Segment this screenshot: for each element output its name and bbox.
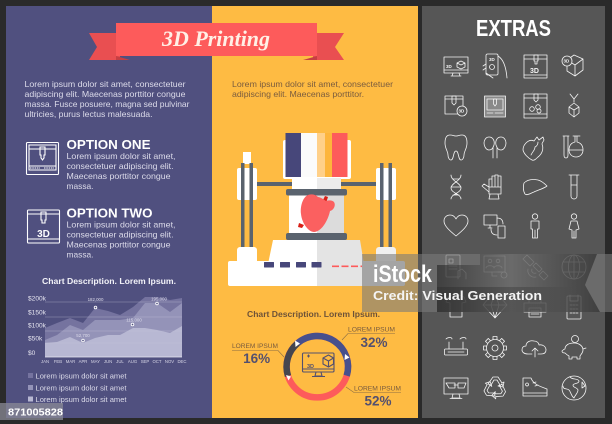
area chart: AUG bbox=[128, 359, 138, 364]
watermark band bbox=[362, 254, 612, 312]
option two text: Lorem ipsum dolor sit amet, bbox=[66, 220, 176, 230]
icon: test tube bbox=[569, 175, 579, 199]
title: 3D Printing bbox=[161, 26, 270, 51]
icon: 3D glasses monitor bbox=[444, 378, 468, 398]
icon: cloud upload bbox=[522, 341, 546, 357]
icon: robot claw cube bbox=[569, 94, 579, 117]
panel: centre yellow bbox=[212, 6, 418, 418]
donut chart bbox=[286, 336, 350, 397]
icon: cube 3D bbox=[562, 55, 583, 76]
intro text: left: massa. Fusce posuere, magna sed pulvinar bbox=[24, 99, 190, 109]
icon: box 3D badge bbox=[445, 96, 467, 116]
watermark text: iStock bbox=[373, 261, 433, 288]
option one text: Maecenas porttitor congue bbox=[66, 171, 171, 181]
panel: left purple bbox=[6, 6, 212, 418]
area chart: NOV bbox=[165, 359, 174, 364]
icon: printer 3D bbox=[524, 55, 547, 78]
icon: option one printer bbox=[26, 142, 58, 174]
icon: sneaker bbox=[523, 378, 547, 396]
icon: heart model bbox=[298, 194, 335, 232]
icon grid bbox=[444, 54, 586, 401]
callout: 32% bbox=[342, 326, 395, 350]
icon: phone in hand bbox=[483, 54, 507, 78]
area chart: FEB bbox=[54, 359, 62, 364]
chart heading: left: Chart Description. Lorem Ipsum. bbox=[42, 276, 176, 286]
callout: 52%: 52% bbox=[364, 394, 392, 408]
icon: monitor with 3D cube bbox=[302, 353, 334, 376]
intro text: left bbox=[24, 79, 190, 119]
icon: option two printer: 3D bbox=[37, 229, 50, 240]
area chart: 195,000 bbox=[151, 296, 167, 302]
icon: heart bbox=[444, 215, 468, 236]
option two text: massa. bbox=[66, 250, 94, 260]
chart heading: centre: Chart Description. Lorem Ipsum. bbox=[247, 309, 380, 319]
3D printer illustration bbox=[228, 133, 405, 286]
icon: man bbox=[531, 214, 539, 238]
area chart: $100k bbox=[28, 322, 47, 330]
callout: 52% bbox=[346, 386, 401, 408]
icon: phone with hand bbox=[446, 255, 466, 279]
icon: t-shirt bbox=[446, 295, 466, 317]
callout: 32%: 32% bbox=[360, 335, 388, 350]
image id tag bbox=[0, 403, 63, 420]
icon: printer office bbox=[524, 297, 546, 317]
area chart: SEP bbox=[141, 359, 149, 364]
area chart: APR bbox=[79, 359, 87, 364]
intro text: left: ultricies, purus lectus malesuada. bbox=[24, 109, 152, 119]
option two text: consectetuer adipiscing elit. bbox=[66, 230, 174, 240]
icon: world wide web bbox=[562, 255, 586, 279]
area chart: 52,700 bbox=[76, 333, 90, 338]
callout: 52%: LOREM IPSUM bbox=[354, 386, 401, 392]
icon: phone in hand: 3D bbox=[489, 57, 496, 62]
icon: monitor 3D: 3D bbox=[446, 64, 453, 69]
area chart: $50k bbox=[28, 336, 43, 342]
icon: tooth bbox=[445, 135, 467, 160]
area chart: JAN bbox=[41, 359, 49, 364]
area chart: DEC bbox=[177, 359, 187, 364]
area chart: $200k bbox=[28, 296, 47, 302]
icon: printer with cubes bbox=[524, 94, 547, 118]
intro text: left: adipiscing elit. Maecenas porttitor congue bbox=[24, 89, 186, 99]
icon: woman bbox=[569, 214, 579, 238]
icon: liver bbox=[523, 179, 547, 195]
icon: globe bbox=[562, 376, 586, 400]
area chart: MAY bbox=[91, 359, 100, 364]
chart legend: Lorem ipsum dolor sit amet bbox=[36, 383, 126, 392]
area chart bbox=[28, 296, 187, 364]
option one text: massa. bbox=[66, 181, 94, 191]
callout: 16% bbox=[232, 343, 284, 366]
callout: 16%: LOREM IPSUM bbox=[232, 343, 278, 350]
intro text: centre: adipiscing elit. Maecenas porttitor. bbox=[232, 89, 364, 99]
title ribbon bbox=[89, 23, 344, 60]
area chart: JUN bbox=[104, 359, 112, 364]
option one text: Lorem ipsum dolor sit amet, bbox=[66, 151, 176, 161]
icon: robotic hand bbox=[482, 175, 501, 199]
intro text: left: Lorem ipsum dolor sit amet, consectetuer bbox=[24, 79, 186, 89]
option one text bbox=[66, 138, 176, 191]
icon: piggy bank bbox=[562, 336, 586, 359]
icon: presentation screen bbox=[484, 256, 507, 278]
area chart: $150k bbox=[28, 310, 47, 316]
chart legend: Lorem ipsum dolor sit amet bbox=[36, 395, 126, 404]
icon: monitor 3D bbox=[444, 57, 468, 76]
intro text: centre bbox=[232, 79, 393, 99]
icon: calculator bbox=[567, 295, 581, 319]
icon: option two printer bbox=[28, 210, 60, 243]
area chart: OCT bbox=[152, 359, 162, 364]
icon: test tube and flask bbox=[563, 136, 583, 158]
area chart: JUL bbox=[116, 359, 124, 364]
icon: box 3D badge: 3D bbox=[458, 108, 465, 114]
chart legend: Lorem ipsum dolor sit amet bbox=[36, 372, 126, 380]
option two text: Maecenas porttitor congue bbox=[66, 240, 171, 250]
icon: monitor with 3D cube: 3D bbox=[307, 364, 314, 370]
chart legend bbox=[28, 372, 126, 404]
extras heading: EXTRAS bbox=[476, 15, 551, 41]
option one text: OPTION ONE bbox=[66, 138, 150, 152]
icon: diamond bbox=[483, 299, 507, 318]
area chart: $0 bbox=[28, 350, 36, 357]
icon: printer filled bbox=[484, 96, 506, 117]
callout: 16%: 16% bbox=[243, 351, 270, 366]
option one text: consectetuer adipiscing elit. bbox=[66, 161, 174, 171]
icon: gear bbox=[484, 336, 506, 360]
area chart: 115,000 bbox=[126, 318, 142, 322]
watermark band: Credit: Visual Generation bbox=[373, 288, 542, 303]
callout: 32%: LOREM IPSUM bbox=[348, 326, 395, 334]
option two text bbox=[66, 206, 176, 260]
icon: recycle bbox=[481, 377, 508, 401]
intro text: centre: Lorem ipsum dolor sit amet, consectetuer bbox=[232, 79, 393, 89]
icon: wifi router bbox=[444, 338, 468, 355]
area chart: MAR bbox=[66, 359, 75, 364]
icon: satellite bbox=[523, 255, 548, 280]
icon: computer transfer bbox=[484, 215, 505, 238]
panel: extras dark bbox=[422, 6, 605, 418]
image id tag: 871005828 bbox=[8, 406, 63, 418]
icon: DNA bbox=[451, 175, 461, 199]
option two text: OPTION TWO bbox=[66, 206, 153, 220]
area chart: 182,000 bbox=[88, 297, 104, 302]
icon: printer 3D: 3D bbox=[530, 68, 539, 75]
icon: kidneys bbox=[484, 137, 506, 158]
icon: anatomical heart bbox=[523, 137, 544, 160]
icon: cube 3D: 3D bbox=[564, 58, 570, 64]
